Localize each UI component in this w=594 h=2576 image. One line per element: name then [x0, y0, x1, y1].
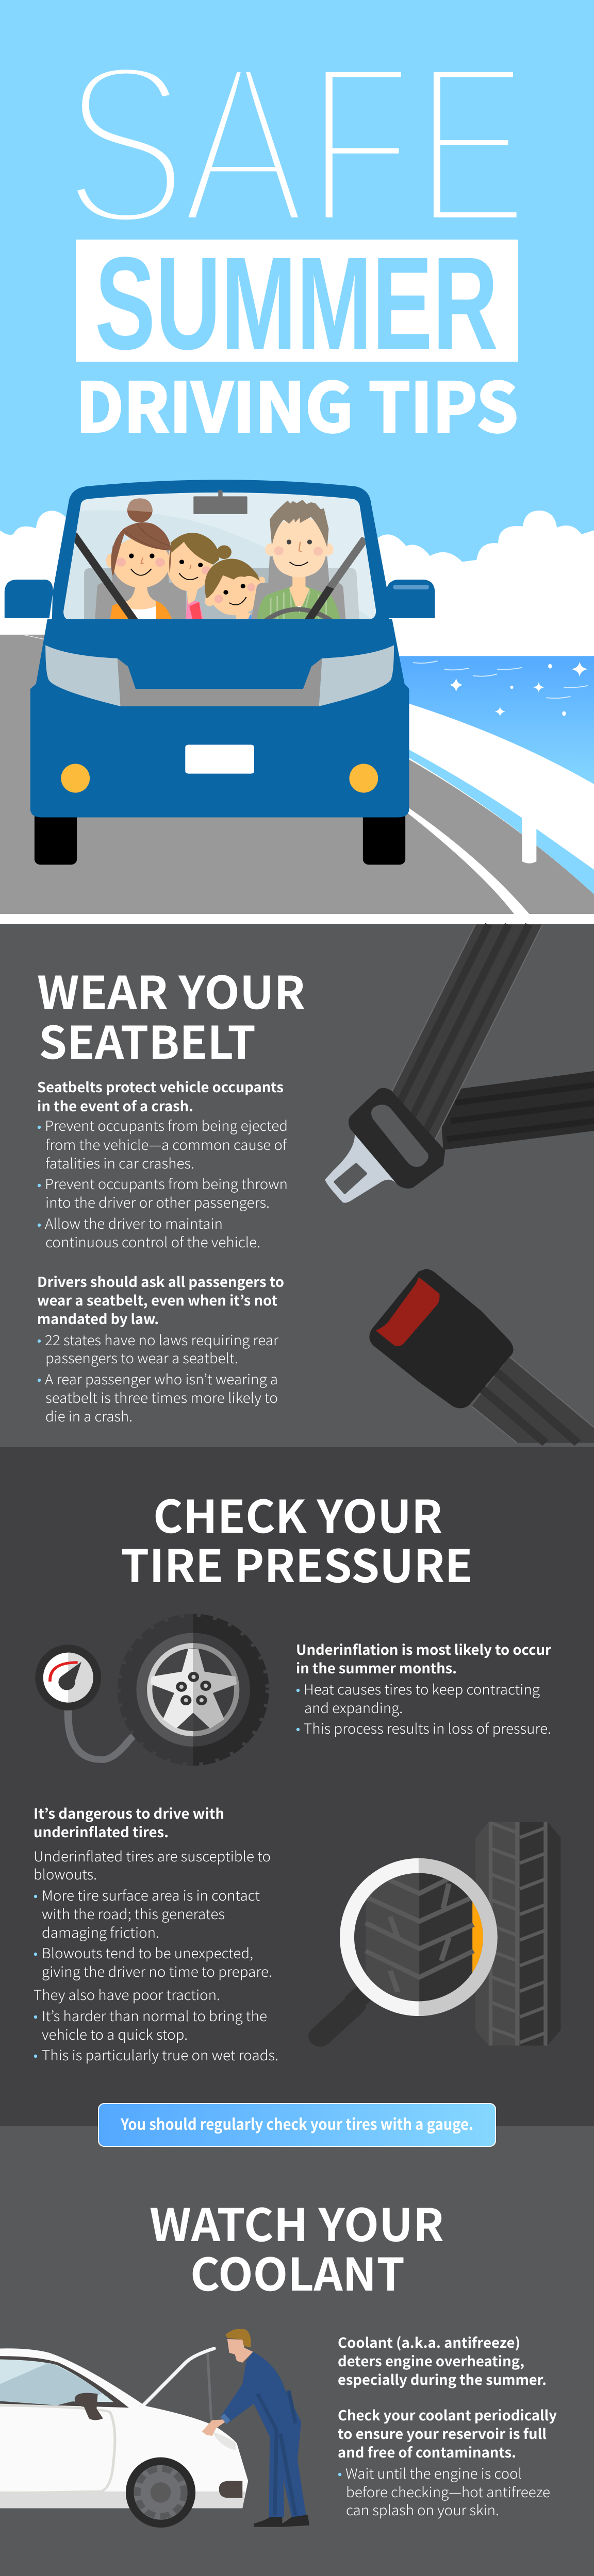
text: dangerous underinflated tires: [34, 1803, 278, 2064]
illustration: man checking coolant under car hood: [0, 2329, 309, 2528]
text: drivers should ask: seatbelt is three times more likely to: [45, 1387, 278, 1407]
heading: check your tire pressure: [121, 1481, 473, 1596]
illustration: clouds: [0, 511, 594, 618]
handle: [351, 1992, 366, 2005]
text: dangerous underinflated tires: It’s harder than normal to bring the: [42, 2005, 267, 2025]
text: seatbelts protect: Allow the driver to maintain: [45, 1213, 223, 1233]
lens view: [354, 1873, 483, 2001]
road line: [407, 808, 529, 914]
text: underinflation: [296, 1639, 551, 1738]
illustration: coastal road scene: [0, 618, 594, 914]
text: dangerous underinflated tires: It’s dangerous to drive with: [34, 1803, 224, 1823]
text: dangerous underinflated tires: underinflated tires.: [34, 1821, 169, 1841]
heading: watch your coolant: [150, 2190, 444, 2304]
guardrail: [409, 704, 594, 870]
panel: header sky background: [0, 0, 594, 635]
text: dangerous underinflated tires: Blowouts tend to be unexpected,: [42, 1942, 253, 1962]
headlights: [45, 645, 121, 706]
illustration: seatbelt latch: [325, 924, 594, 1203]
text: check coolant periodically: Check your coolant periodically: [338, 2404, 557, 2425]
panel: seatbelt section background: [0, 924, 594, 1447]
car body: [0, 2348, 248, 2508]
text: seatbelts protect: Prevent occupants from being thrown: [45, 1173, 288, 1193]
text: underinflation: Underinflation is most likely to occur: [296, 1639, 551, 1659]
illustration: seatbelt buckle: [369, 1269, 594, 1443]
lens frame: [340, 1858, 498, 2016]
text: drivers should ask: wear a seatbelt, even when it’s not: [37, 1290, 277, 1310]
lap strap: [439, 1071, 594, 1150]
text: check coolant periodically: Wait until the engine is cool: [345, 2463, 522, 2483]
text: drivers should ask: 22 states have no laws requiring rear: [45, 1329, 278, 1349]
mechanic: [202, 2419, 225, 2436]
text: drivers should ask: die in a crash.: [45, 1405, 133, 1426]
light blue verge: [409, 750, 594, 894]
father seat: [268, 556, 329, 584]
text: drivers should ask: mandated by law.: [37, 1308, 159, 1328]
text: seatbelts protect: in the event of a crash.: [37, 1095, 193, 1115]
side mirrors: [5, 580, 435, 618]
daughter: [186, 599, 204, 620]
text: dangerous underinflated tires: with the road; this generates: [42, 1903, 225, 1923]
title: SAFE: S: [62, 16, 188, 273]
text: dangerous underinflated tires: giving the driver no time to prepare.: [42, 1961, 272, 1981]
road: [0, 635, 594, 914]
illustration: tire tread and magnifying glass: [320, 1822, 560, 2045]
seatbelts and steering wheel: [266, 609, 332, 621]
text: underinflation: in the summer months.: [296, 1657, 457, 1677]
text: seatbelts protect: [37, 1076, 288, 1251]
text: check coolant periodically: [338, 2404, 557, 2519]
text: check coolant periodically: to ensure your reservoir is full: [338, 2423, 547, 2443]
windshield: [63, 493, 376, 620]
text: seatbelts protect: continuous control of the vehicle.: [45, 1231, 260, 1251]
text: dangerous underinflated tires: More tire surface area is in contact: [42, 1885, 260, 1905]
fog lights: [61, 764, 90, 793]
text: underinflation: This process results in loss of pressure.: [304, 1718, 551, 1738]
wheel: [126, 2458, 195, 2528]
panel: white divider: [0, 914, 594, 924]
text: coolant deters overheating: especially during the summer.: [338, 2369, 547, 2389]
title: SAFE: A: [180, 16, 307, 273]
heading: watch your coolant: WATCH YOUR: [150, 2190, 444, 2255]
heading: check your tire pressure: CHECK YOUR: [153, 1481, 442, 1546]
tire: [118, 1614, 269, 1766]
text: underinflation: Heat causes tires to keep contracting: [304, 1679, 540, 1699]
text: dangerous underinflated tires: Underinflated tires are susceptible to: [34, 1845, 271, 1866]
heading: watch your coolant: COOLANT: [190, 2239, 405, 2304]
text: drivers should ask: [37, 1271, 284, 1426]
illustration: tire and gauge: [35, 1614, 269, 1766]
panel: coolant section background: [0, 2126, 594, 2576]
text: drivers should ask: Drivers should ask all passengers to: [37, 1271, 284, 1291]
raised hood and prop rod: [143, 2348, 214, 2405]
red release button: [376, 1277, 440, 1346]
text: drivers should ask: A rear passenger who isn’t wearing a: [45, 1368, 278, 1388]
text: dangerous underinflated tires: They also have poor traction.: [34, 1984, 220, 2004]
text: dangerous underinflated tires: blowouts.: [34, 1863, 97, 1884]
text: seatbelts protect: from the vehicle—a common cause of: [45, 1134, 287, 1154]
text: seatbelts protect: into the driver or other passengers.: [45, 1192, 270, 1212]
text: underinflation: and expanding.: [304, 1697, 403, 1717]
hose: [68, 1709, 157, 1760]
text: seatbelts protect: Prevent occupants from being ejected: [45, 1115, 288, 1135]
mother: [110, 601, 172, 620]
car front body: [30, 619, 409, 865]
callout: check tires with a gauge: [98, 2104, 496, 2146]
rear view mirror: [218, 490, 223, 497]
guardrail post: [522, 812, 536, 863]
grille: [118, 658, 322, 706]
license plate: [185, 745, 254, 774]
son: [236, 613, 251, 620]
ocean: [398, 656, 594, 784]
title: SAFE: [62, 16, 529, 273]
latch holder: [349, 1088, 445, 1189]
text: check coolant periodically: before checking—hot antifreeze: [346, 2481, 550, 2501]
heading: wear your seatbelt: [37, 957, 305, 1072]
text: coolant deters overheating: Coolant (a.k.a. antifreeze): [338, 2332, 520, 2352]
text: coolant deters overheating: [338, 2332, 547, 2389]
text: check coolant periodically: and free of contaminants.: [338, 2442, 516, 2462]
car roof and windshield frame: [52, 480, 389, 619]
illustration: family car: [5, 480, 435, 865]
sparkles: [449, 662, 588, 717]
title: SAFE: F: [307, 16, 412, 273]
text: dangerous underinflated tires: damaging friction.: [42, 1922, 159, 1942]
gauge: [35, 1645, 101, 1710]
heading: wear your seatbelt: SEATBELT: [39, 1007, 256, 1072]
panel: tire section background: [0, 1447, 594, 2126]
title: SAFE: E: [415, 16, 529, 273]
shoulder strap: [359, 924, 542, 1157]
text: seatbelts protect: fatalities in car crashes.: [45, 1153, 194, 1173]
rear seats: [84, 568, 359, 620]
text: check coolant periodically: can splash on your skin.: [346, 2499, 499, 2519]
callout: check tires with a gauge: You should regularly check your tires with a gauge.: [120, 2112, 473, 2134]
text: drivers should ask: passengers to wear a seatbelt.: [45, 1347, 238, 1367]
text: dangerous underinflated tires: vehicle to a quick stop.: [42, 2024, 188, 2044]
heading: wear your seatbelt: WEAR YOUR: [37, 957, 305, 1022]
heading: check your tire pressure: TIRE PRESSURE: [121, 1531, 473, 1596]
text: seatbelts protect: Seatbelts protect vehicle occupants: [37, 1076, 284, 1096]
father: [257, 586, 340, 620]
title: DRIVING TIPS: DRIVING TIPS: [76, 353, 518, 451]
metal tongue: [325, 1128, 402, 1203]
text: coolant deters overheating: deters engine overheating,: [338, 2350, 524, 2370]
text: dangerous underinflated tires: This is particularly true on wet roads.: [42, 2044, 278, 2064]
